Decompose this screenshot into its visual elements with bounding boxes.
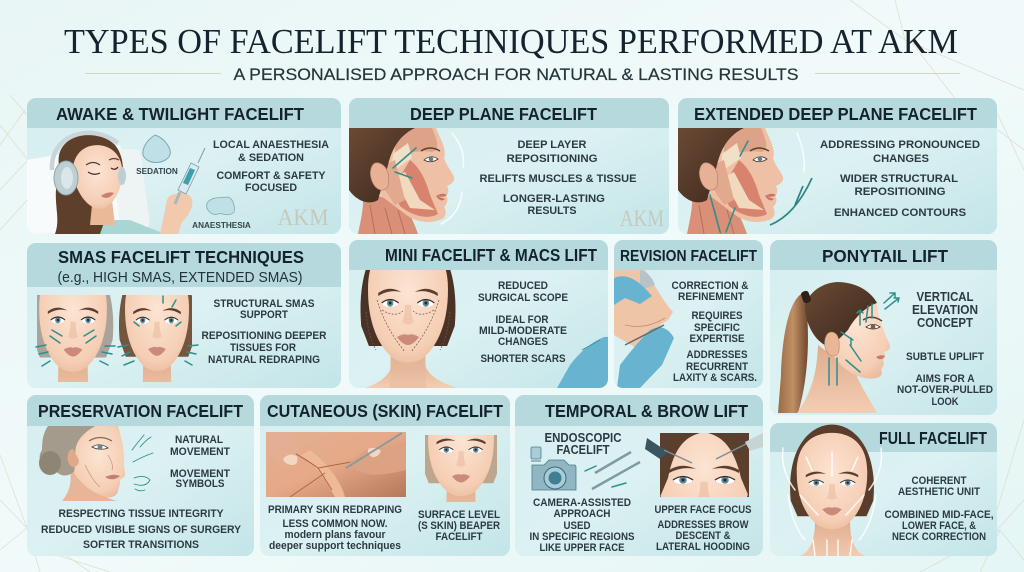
text block: endoscopic: ENDOSCOPIC <box>544 431 622 445</box>
text block: REPOSITIONING <box>854 186 946 198</box>
text block: SHORTER SCARS <box>480 353 566 365</box>
text block: TISSUES FOR <box>230 342 296 354</box>
heading: TEMPORAL & BROW LIFT <box>545 401 748 421</box>
text block: REDUCED <box>498 280 548 292</box>
text block <box>820 139 980 219</box>
text block: DEEP LAYER <box>518 139 587 151</box>
text block: MILD-MODERATE <box>479 325 567 337</box>
text block: IDEAL FOR <box>496 314 549 326</box>
heading: PONYTAIL LIFT <box>822 246 948 266</box>
text block: endoscopic <box>530 431 634 554</box>
text block: SUPPORT <box>240 309 288 321</box>
heading <box>260 395 510 426</box>
text block: endoscopic: CAMERA-ASSISTED <box>533 497 631 509</box>
illustration: older woman in profile <box>39 426 125 501</box>
text block <box>41 434 242 551</box>
illustration: relaxed patient with headphones <box>27 133 192 234</box>
text block: COHERENT <box>912 475 967 487</box>
panel: smas facelift techniques <box>27 243 341 388</box>
text block: COMFORT & SAFETY <box>216 170 326 182</box>
heading <box>27 395 254 426</box>
heading: REVISION FACELIFT <box>620 248 757 265</box>
text block: (S SKIN) BEAPER <box>418 520 500 532</box>
text block: WIDER STRUCTURAL <box>840 173 958 185</box>
text block: FACELIFT <box>436 531 483 543</box>
heading <box>614 240 763 270</box>
text block: SPECIFIC <box>694 322 740 334</box>
heading <box>27 243 341 287</box>
logo: AKM <box>278 205 328 230</box>
panel: cutaneous skin facelift <box>260 392 510 556</box>
text block: RELIFTS MUSCLES & TISSUE <box>480 173 636 185</box>
arrows around the faces <box>36 345 198 366</box>
logo: AKM <box>620 206 664 231</box>
heading <box>349 98 669 128</box>
text block: ADDRESSES <box>686 349 748 361</box>
text block <box>884 475 994 543</box>
panel: deep plane facelift <box>349 98 669 234</box>
text block: PRIMARY SKIN REDRAPING <box>268 504 402 516</box>
movement symbols <box>132 435 153 491</box>
text block: ENHANCED CONTOURS <box>834 207 966 219</box>
text block: SUBTLE UPLIFT <box>906 351 984 363</box>
text block: endoscopic: FACELIFT <box>556 443 610 457</box>
text block: REDUCED VISIBLE SIGNS OF SURGERY <box>41 524 242 536</box>
panel: revision facelift <box>614 240 763 388</box>
text block: RESPECTING TISSUE INTEGRITY <box>58 508 224 520</box>
text block: upper face: DESCENT & <box>676 530 731 542</box>
text block: LOOK <box>932 396 959 408</box>
text block: NOT-OVER-PULLED <box>897 384 993 396</box>
text block: LOWER FACE, & <box>902 520 976 532</box>
heading <box>770 240 997 270</box>
heading: PRESERVATION FACELIFT <box>38 401 243 421</box>
text block: VERTICAL <box>916 290 974 304</box>
text block: LESS COMMON NOW. <box>282 518 388 530</box>
subtitle: A PERSONALISED APPROACH FOR NATURAL & LASTING RESULTS <box>234 65 798 84</box>
heading band <box>770 423 997 452</box>
text block: SOFTER TRANSITIONS <box>83 539 199 551</box>
text block: NATURAL <box>175 434 223 446</box>
text block: upper face: ADDRESSES BROW <box>658 519 749 531</box>
heading: AWAKE & TWILIGHT FACELIFT <box>56 104 304 124</box>
text block: REPOSITIONING DEEPER <box>202 330 327 342</box>
text block: ELEVATION <box>912 303 978 317</box>
text block: RECURRENT <box>686 361 748 373</box>
text block <box>672 280 757 384</box>
text block: FOCUSED <box>245 182 297 194</box>
label: sedation: SEDATION <box>136 167 178 176</box>
heading: SMAS FACELIFT TECHNIQUES <box>58 247 304 267</box>
text block <box>268 504 500 552</box>
text block: REFINEMENT <box>678 291 744 303</box>
text block: AESTHETIC UNIT <box>898 486 980 498</box>
text block: REPOSITIONING <box>506 153 598 165</box>
arrows: upward <box>884 293 899 309</box>
text block: deeper support techniques <box>269 540 401 552</box>
panel: full facelift <box>770 423 997 563</box>
text block: COMBINED MID-FACE, <box>884 509 994 521</box>
illustration: face with lift vectors <box>782 425 882 563</box>
text block: CORRECTION & <box>672 280 749 292</box>
text block: endoscopic: IN SPECIFIC REGIONS <box>530 531 634 543</box>
panel: mini facelift and macs lift <box>349 240 608 388</box>
heading: MINI FACELIFT & MACS LIFT <box>385 245 597 265</box>
text block: MOVEMENT <box>170 446 230 458</box>
illustration: face with incision lines and gloved hand <box>360 270 608 388</box>
text block: EXPERTISE <box>690 333 744 345</box>
heading: (e.g., HIGH SMAS, EXTENDED SMAS) <box>58 269 302 286</box>
text block <box>202 298 327 366</box>
photo: forehead and brows with endoscope <box>660 433 749 497</box>
text block: LONGER-LASTING <box>503 193 605 205</box>
icon: sedation mask <box>143 135 170 162</box>
illustration: profile with ponytail <box>778 282 890 413</box>
text block: SURFACE LEVEL <box>418 509 500 521</box>
icon: endoscope instruments <box>645 433 763 463</box>
icon: camera <box>531 447 576 490</box>
text block: endoscopic: APPROACH <box>554 508 611 520</box>
text block: AIMS FOR A <box>916 373 975 385</box>
text block: CHANGES <box>873 153 929 165</box>
title: TYPES OF FACELIFT TECHNIQUES PERFORMED AT AKM <box>64 22 958 61</box>
heading <box>515 395 763 426</box>
text block: SURGICAL SCOPE <box>478 292 568 304</box>
text block <box>480 139 636 217</box>
text block: modern plans favour <box>284 529 386 541</box>
heading text: FULL FACELIFT <box>879 428 987 448</box>
heading <box>349 240 608 270</box>
panel: temporal and brow lift <box>515 395 763 572</box>
text block: upper face <box>654 504 752 553</box>
text block: endoscopic: LIKE UPPER FACE <box>540 542 624 554</box>
illustration: before and after faces <box>37 295 192 382</box>
text block: endoscopic: USED <box>564 520 591 532</box>
text block: LAXITY & SCARS. <box>673 372 757 384</box>
illustration: muscular profile with neck <box>678 128 812 234</box>
heading <box>27 98 341 128</box>
text block: LOCAL ANAESTHESIA <box>213 139 329 151</box>
icon: anaesthesia gel <box>207 197 234 215</box>
photo: skin being redraped <box>266 432 406 497</box>
label: anaesthesia: ANAESTHESIA <box>192 221 251 230</box>
text block: REQUIRES <box>692 310 742 322</box>
heading <box>678 98 997 128</box>
text block <box>478 280 568 365</box>
text block: NATURAL REDRAPING <box>208 354 320 366</box>
text block: SYMBOLS <box>176 478 224 490</box>
text block: CHANGES <box>498 336 548 348</box>
icon: surgical instruments <box>585 452 640 489</box>
heading: EXTENDED DEEP PLANE FACELIFT <box>694 104 977 124</box>
panel: awake and twilight facelift <box>27 98 341 234</box>
heading: CUTANEOUS (SKIN) FACELIFT <box>267 401 503 421</box>
text block: CONCEPT <box>917 316 973 330</box>
text block: upper face: UPPER FACE FOCUS <box>654 504 752 516</box>
text block: upper face: LATERAL HOODING <box>656 541 750 553</box>
text block <box>897 290 993 408</box>
text block: & SEDATION <box>238 152 304 164</box>
photo: face after skin lift <box>425 435 497 502</box>
text block: MOVEMENT <box>170 468 230 480</box>
text block: ADDRESSING PRONOUNCED <box>820 139 980 151</box>
text block <box>213 139 329 194</box>
illustration: muscular profile <box>349 128 464 234</box>
heading: DEEP PLANE FACELIFT <box>410 104 597 124</box>
illustration: gloved hands and profile <box>614 270 674 388</box>
icon: syringe <box>175 148 205 204</box>
panel: preservation facelift <box>27 395 254 556</box>
text block: NECK CORRECTION <box>892 531 986 543</box>
text block: RESULTS <box>528 205 576 217</box>
text block: STRUCTURAL SMAS <box>214 298 314 310</box>
panel: extended deep plane facelift <box>678 98 997 234</box>
panel: ponytail lift <box>770 240 997 415</box>
